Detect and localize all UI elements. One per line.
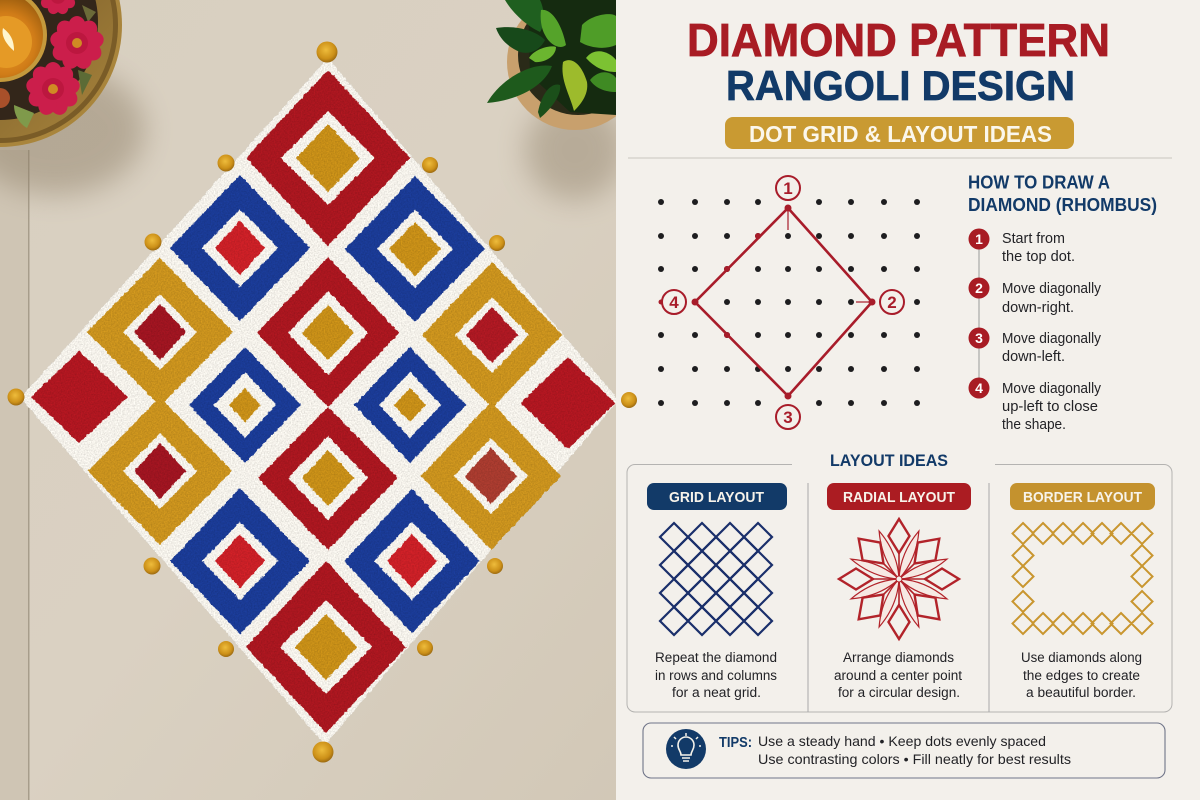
grid layout caption: for a neat grid. [672,685,761,700]
tips text: TIPS: [719,734,752,751]
rhombus outline [692,204,876,400]
radial layout caption [834,650,962,700]
step 4: Move diagonally [1002,381,1102,397]
border layout caption: Use diamonds along [1021,650,1142,665]
radial layout pill [827,483,971,510]
grid layout caption [655,650,777,700]
step 3 [968,328,1102,365]
colored diamond cells [31,70,615,733]
layout ideas heading: LAYOUT IDEAS [830,452,948,470]
tips text: Use contrasting colors • Fill neatly for best results [758,751,1071,767]
rangoli diamond pattern [20,58,619,745]
step 2: 2 [975,280,983,296]
number badge 1: 1 [783,179,793,198]
subtitle pill: DOT GRID & LAYOUT IDEAS [749,121,1052,147]
panel: border layout [1010,483,1155,700]
title: RANGOLI DESIGN [726,62,1075,109]
icon: radial diamond flower [839,519,959,639]
brass plate with diya and flowers [0,0,122,147]
number badge 3: 3 [783,408,793,427]
step 4 [968,378,1102,433]
grid layout caption: in rows and columns [655,668,777,683]
step connector line [978,239,980,388]
step 1 [968,228,1075,265]
icon: diamond border [1012,523,1152,634]
radial layout caption: for a circular design. [838,685,960,700]
flower [49,16,105,71]
grid layout pill: GRID LAYOUT [669,489,764,506]
how to draw heading: HOW TO DRAW A [968,172,1110,192]
tips text [719,733,1071,767]
number badge 2 [880,290,904,314]
step 3: down-left. [1002,349,1065,365]
right panel background [616,0,1200,800]
radial layout caption: Arrange diamonds [843,650,954,665]
how to draw heading [968,172,1157,215]
gold bead over panel edge [621,392,637,408]
tips box [643,723,1165,778]
radial layout pill: RADIAL LAYOUT [843,489,955,506]
step 4: up-left to close [1002,399,1098,415]
tips text: Use a steady hand • Keep dots evenly spaced [758,733,1046,749]
step 2: down-right. [1002,300,1074,316]
radial layout caption: around a center point [834,668,962,683]
border layout caption: the edges to create [1023,668,1140,683]
step 2 [968,278,1102,316]
number badge 2: 2 [887,293,897,312]
step 3: Move diagonally [1002,331,1102,347]
step 1: 1 [975,231,983,247]
layout ideas panel frame [627,458,1172,712]
icon: diamond grid [660,523,772,635]
dot grid diagram [658,176,920,429]
icon: light bulb [666,729,706,769]
number badge 4: 4 [669,293,679,312]
number badge 3 [776,405,800,429]
title [687,14,1110,109]
step 1: the top dot. [1002,249,1075,265]
flower [25,62,81,117]
flower [40,0,76,14]
gold beads around rangoli [8,42,505,762]
photo background: stone floor [0,0,643,800]
rangoli white powder base [20,58,619,745]
dot grid [658,199,920,406]
step 4: 4 [975,380,983,396]
border layout caption: a beautiful border. [1026,685,1136,700]
title: DIAMOND PATTERN [687,14,1110,66]
step 4: the shape. [1002,417,1066,433]
number badge 4 [658,290,686,314]
grid layout pill [647,483,787,510]
number badge 1 [776,176,800,200]
step 1: Start from [1002,231,1065,247]
border layout pill: BORDER LAYOUT [1023,489,1142,506]
panel: grid layout [647,483,787,700]
step 3: 3 [975,330,983,346]
how to draw heading: DIAMOND (RHOMBUS) [968,195,1157,215]
panel: radial layout [827,483,971,700]
border layout caption [1021,650,1142,700]
border layout pill [1010,483,1155,510]
step 2: Move diagonally [1002,281,1102,297]
potted plant [487,0,616,130]
grid layout caption: Repeat the diamond [655,650,777,665]
